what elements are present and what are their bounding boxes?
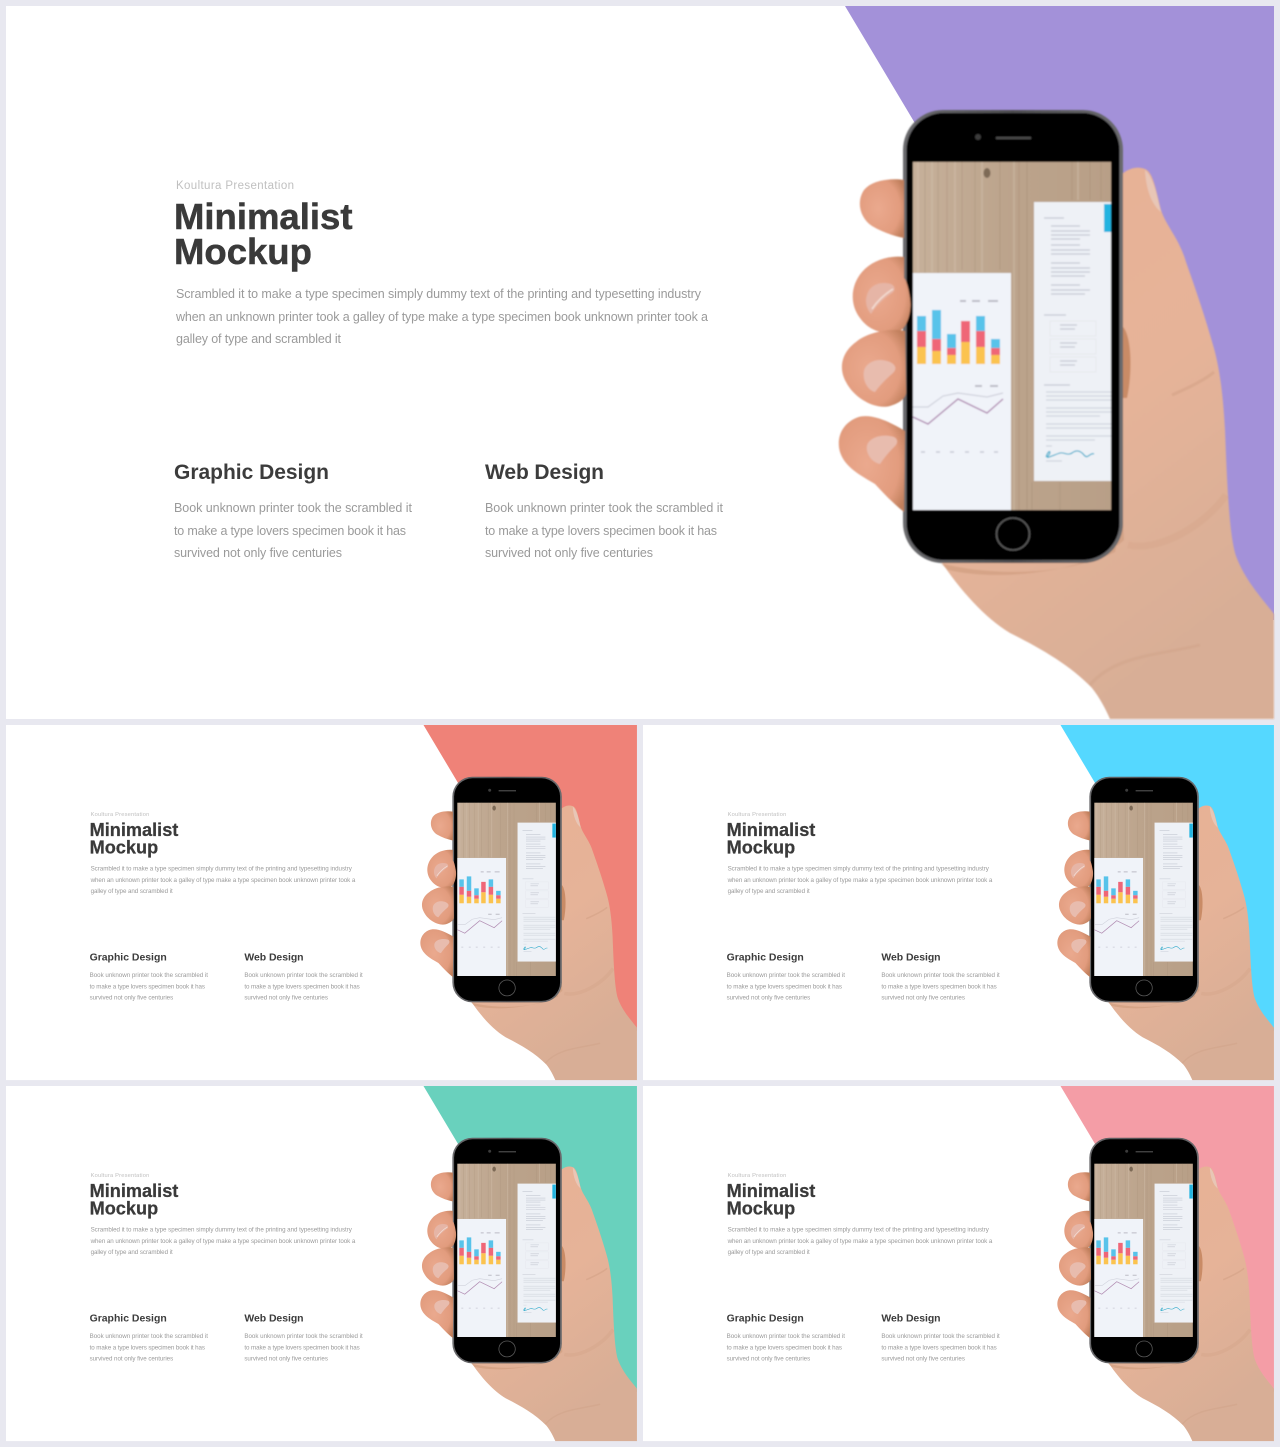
- text: intro paragraph: [727, 865, 993, 895]
- illustration: hand holding phone: [420, 1138, 637, 1441]
- illustration: hand holding phone: [839, 110, 1274, 719]
- description: Book unknown printer took the scrambled it: [174, 501, 413, 515]
- fingers: [839, 179, 911, 512]
- phone screen: [913, 162, 1111, 510]
- index finger: [860, 179, 904, 238]
- text: kicker: Koultura Presentation: [176, 180, 294, 192]
- wood grain: [925, 162, 1101, 510]
- text: intro paragraph: galley of type and scrambled it: [728, 1249, 810, 1256]
- slide background: [6, 725, 637, 1080]
- text: title: Mockup: [90, 837, 158, 857]
- phone body: [903, 110, 1123, 563]
- column: Graphic Design: Graphic Design: [90, 953, 167, 964]
- column: Graphic Design: survived not only five centuries: [727, 994, 810, 1001]
- text: intro paragraph: when an unknown printer took a galley of type make a type specimen book unknown printer took a: [727, 1238, 993, 1245]
- column: Web Design: to make a type lovers specimen book it has: [881, 1344, 997, 1351]
- thumb crease and palm shading: [1120, 327, 1130, 398]
- illustration: hand holding phone: [1057, 1138, 1274, 1441]
- column: Graphic Design: to make a type lovers specimen book it has: [90, 983, 205, 990]
- text: intro paragraph: when an unknown printer took a galley of type make a type specimen book unknown printer took a: [90, 1238, 356, 1245]
- text: intro paragraph: when an unknown printer took a galley of type make a type specimen book unknown printer took a: [175, 310, 708, 324]
- column: Web Design: survived not only five centuries: [244, 1355, 328, 1362]
- little finger: [839, 416, 905, 512]
- description: [485, 501, 724, 560]
- paper sheet: [1034, 202, 1111, 481]
- text: intro paragraph: Scrambled it to make a type specimen simply dummy text of the printing and typesetting industry: [728, 1226, 990, 1233]
- column: Web Design: Web Design: [881, 953, 941, 964]
- text: title: Mockup: [90, 1198, 158, 1218]
- column: Graphic Design: survived not only five centuries: [727, 1355, 810, 1362]
- text: intro paragraph: [90, 1226, 356, 1256]
- illustration: hand holding phone: [1057, 777, 1274, 1080]
- middle finger nail highlight: [872, 289, 893, 309]
- column: Graphic Design: Book unknown printer took the scrambled it: [90, 1333, 208, 1340]
- text: title: Minimalist: [727, 820, 815, 840]
- column: Web Design: Book unknown printer took the scrambled it: [881, 972, 1000, 979]
- panel: coral slide: [6, 725, 637, 1080]
- column: Web Design: survived not only five centuries: [881, 1355, 965, 1362]
- slide background: [6, 1086, 637, 1441]
- home button: [996, 518, 1030, 550]
- column: Graphic Design: survived not only five centuries: [90, 1355, 173, 1362]
- illustration: hand holding phone: [420, 777, 637, 1080]
- column: Graphic Design: to make a type lovers specimen book it has: [90, 1344, 205, 1351]
- hand palm: [903, 168, 1274, 719]
- column: Web Design: survived not only five centuries: [881, 994, 965, 1001]
- column: Web Design: Web Design: [881, 1314, 941, 1325]
- chart legend: [960, 300, 998, 302]
- little finger nail: [867, 436, 897, 464]
- signature: [1046, 451, 1094, 457]
- paper with resume: [1034, 202, 1111, 481]
- text: intro paragraph: Scrambled it to make a type specimen simply dummy text of the printing and typesetting industry: [91, 865, 353, 872]
- column: Graphic Design: [174, 461, 413, 560]
- text: intro paragraph: Scrambled it to make a type specimen simply dummy text of the printing and typesetting industry: [91, 1226, 353, 1233]
- text: kicker: Koultura Presentation: [728, 1173, 786, 1179]
- column: Graphic Design: survived not only five centuries: [90, 994, 173, 1001]
- column: Web Design: Web Design: [244, 1314, 304, 1325]
- heading: Web Design: [485, 461, 604, 484]
- panel: cyan slide: [643, 725, 1274, 1080]
- text: title: Minimalist: [727, 1181, 815, 1201]
- text: title: Minimalist: [174, 196, 352, 237]
- colour wedge: cyan: [1060, 725, 1274, 1031]
- column: Graphic Design: Book unknown printer took the scrambled it: [727, 972, 845, 979]
- text: title: Mockup: [727, 837, 795, 857]
- column: Graphic Design: Graphic Design: [727, 953, 804, 964]
- slide background: [6, 6, 1274, 719]
- middle finger nail: [866, 283, 895, 314]
- column: Graphic Design: [727, 953, 845, 1001]
- colour wedge: purple: [845, 6, 1274, 620]
- camera: [975, 134, 981, 140]
- description: [174, 501, 413, 560]
- column: Web Design: to make a type lovers specimen book it has: [244, 1344, 360, 1351]
- phone shadow on palm: [940, 520, 1124, 575]
- column: Web Design: Book unknown printer took the scrambled it: [881, 1333, 1000, 1340]
- column: Graphic Design: Graphic Design: [727, 1314, 804, 1325]
- column: Web Design: [881, 1314, 1000, 1362]
- column: Graphic Design: [90, 953, 208, 1001]
- column: Web Design: [485, 461, 724, 560]
- column: Graphic Design: Book unknown printer took the scrambled it: [727, 1333, 845, 1340]
- text: intro paragraph: when an unknown printer took a galley of type make a type specimen book unknown printer took a: [90, 877, 356, 884]
- panel: pink slide: [643, 1086, 1274, 1441]
- text: intro paragraph: Scrambled it to make a type specimen simply dummy text of the printing and typesetting industry: [728, 865, 990, 872]
- text: kicker: Koultura Presentation: [728, 812, 786, 818]
- column: Web Design: survived not only five centuries: [244, 994, 328, 1001]
- text: title: Minimalist: [90, 820, 178, 840]
- wood knot: [984, 168, 990, 178]
- column: Web Design: Book unknown printer took the scrambled it: [244, 972, 363, 979]
- panel: main slide purple: [6, 6, 1274, 719]
- text: title: Minimalist: [90, 1181, 178, 1201]
- text: intro paragraph: Scrambled it to make a type specimen simply dummy text of the printing and typesetting industry: [176, 287, 702, 301]
- column: Graphic Design: [727, 1314, 845, 1362]
- description: to make a type lovers specimen book it has: [174, 524, 406, 538]
- text: intro paragraph: galley of type and scrambled it: [91, 888, 173, 895]
- text: kicker: Koultura Presentation: [91, 1173, 149, 1179]
- column: Web Design: to make a type lovers specimen book it has: [244, 983, 360, 990]
- middle finger: [853, 257, 911, 333]
- slide background: [643, 1086, 1274, 1441]
- description: survived not only five centuries: [174, 546, 342, 560]
- panel: teal slide: [6, 1086, 637, 1441]
- paper sheet: [913, 273, 1011, 510]
- text: kicker: Koultura Presentation: [91, 812, 149, 818]
- column: Graphic Design: to make a type lovers specimen book it has: [727, 1344, 842, 1351]
- ring finger: [842, 330, 906, 407]
- column: Graphic Design: Graphic Design: [90, 1314, 167, 1325]
- ring finger nail: [864, 360, 895, 392]
- text: title: Mockup: [174, 231, 312, 272]
- speaker: [996, 137, 1031, 139]
- colour wedge: coral: [423, 725, 637, 1031]
- phone front glass: [906, 113, 1120, 560]
- colour wedge: teal: [423, 1086, 637, 1392]
- column: Graphic Design: to make a type lovers specimen book it has: [727, 983, 842, 990]
- description: survived not only five centuries: [485, 546, 653, 560]
- column: Graphic Design: Book unknown printer took the scrambled it: [90, 972, 208, 979]
- blue tab: [1104, 204, 1111, 232]
- stacked bar chart: [917, 310, 1000, 364]
- text: intro paragraph: when an unknown printer took a galley of type make a type specimen book unknown printer took a: [727, 877, 993, 884]
- slide background: [643, 725, 1274, 1080]
- text: intro paragraph: [175, 287, 708, 346]
- column: Web Design: [881, 953, 1000, 1001]
- heading: Graphic Design: [174, 461, 329, 484]
- paper with charts: [913, 273, 1011, 510]
- column: Graphic Design: [90, 1314, 208, 1362]
- text: intro paragraph: galley of type and scrambled it: [176, 332, 342, 346]
- column: Web Design: to make a type lovers specimen book it has: [881, 983, 997, 990]
- column: Web Design: Web Design: [244, 953, 304, 964]
- text: intro paragraph: galley of type and scrambled it: [728, 888, 810, 895]
- colour wedge: pink: [1060, 1086, 1274, 1392]
- column: Web Design: Book unknown printer took the scrambled it: [244, 1333, 363, 1340]
- column: Web Design: [244, 953, 363, 1001]
- description: to make a type lovers specimen book it has: [485, 524, 717, 538]
- line chart: [913, 386, 1003, 452]
- wood background: [913, 162, 1111, 510]
- description: Book unknown printer took the scrambled it: [485, 501, 724, 515]
- column: Web Design: [244, 1314, 363, 1362]
- text: intro paragraph: [90, 865, 356, 895]
- phone casing: [903, 110, 1123, 563]
- text: intro paragraph: [727, 1226, 993, 1256]
- text: intro paragraph: galley of type and scrambled it: [91, 1249, 173, 1256]
- text: title: Mockup: [727, 1198, 795, 1218]
- resume text lines: [1044, 218, 1090, 385]
